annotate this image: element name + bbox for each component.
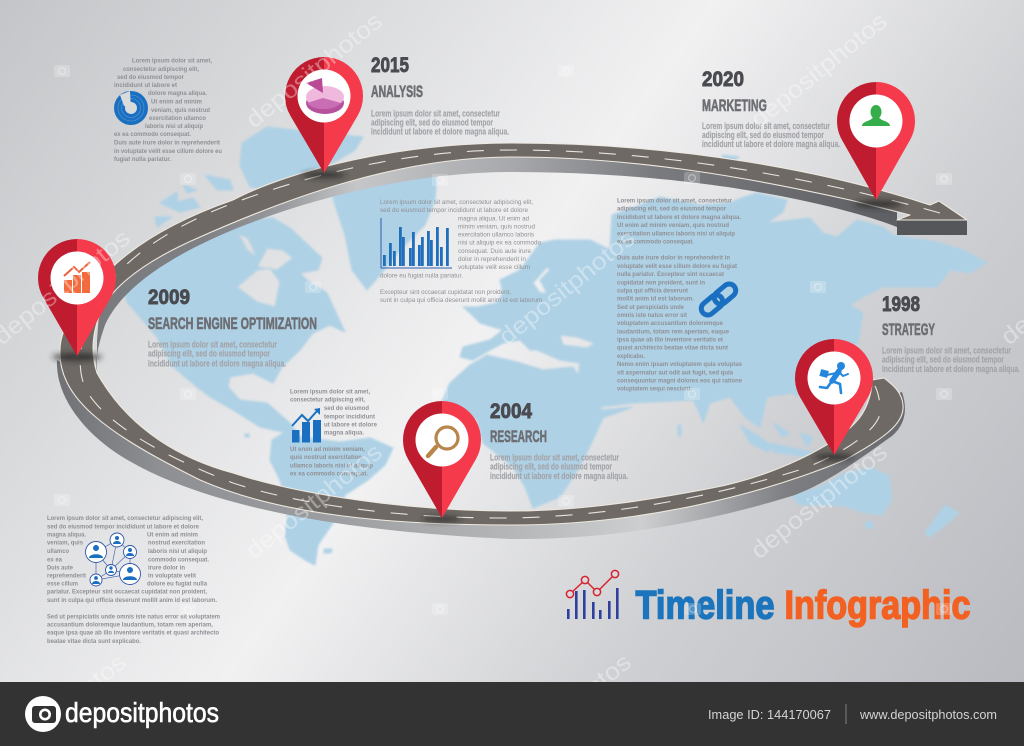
- icon: depositphotos logo: [25, 696, 61, 732]
- milestone: 2020 marketing: [702, 67, 840, 150]
- text block: right column with chain icon: ipsa quae ab illo inventore veritatis et: [617, 337, 724, 344]
- title: Timeline Infographic: Timeline: [636, 584, 774, 628]
- milestone: 2009 search engine optimization: adipiscing elit, sed do eiusmod tempor: [148, 348, 270, 360]
- text block: lower centre with growth icon: magna aliqua.: [324, 429, 364, 436]
- text block: right column with chain icon: quasi architecto beatae vitae dicta sunt: [617, 345, 729, 352]
- icon: growth chart: [292, 408, 321, 442]
- text block: top left with radial icon: dolore magna aliqua.: [148, 90, 207, 97]
- text block: bottom left with network icon: sunt in culpa qui officia deserunt mollit anim id est laborum.: [47, 597, 217, 604]
- text block: lower centre with growth icon: ullamco laboris nisi ut aliquip: [290, 462, 373, 469]
- milestone: 2020 marketing: 2020: [702, 67, 744, 91]
- icon: rising bars: [64, 262, 90, 293]
- milestone: 2020 marketing: MARKETING: [702, 97, 767, 115]
- footer bar: Image ID: 144170067: [708, 707, 831, 722]
- text block: right column with chain icon: adipiscing elit, sed do eiusmod tempor: [617, 206, 726, 213]
- text block: top left with radial icon: Duis aute irure dolor in reprehenderit: [114, 140, 221, 146]
- text block: top left with radial icon: Ut enim ad minim: [151, 98, 202, 106]
- text block: centre with bar chart: Lorem ipsum dolor sit amet, consectetur adipiscing elit,: [380, 199, 533, 206]
- text block: centre with bar chart: [380, 199, 544, 304]
- text block: lower centre with growth icon: sed do eiusmod: [324, 405, 369, 412]
- icon: pie chart: [306, 78, 344, 114]
- text block: centre with bar chart: exercitation ullamco laboris: [458, 232, 534, 239]
- milestone: 2009 search engine optimization: [148, 285, 317, 370]
- milestone: 2009 search engine optimization: 2009: [148, 285, 190, 309]
- road: lower side wall: [57, 360, 905, 539]
- text block: right column with chain icon: consequuntur magni dolores eos qui ratione: [617, 378, 742, 385]
- watermarks: depositphotos: [241, 439, 388, 565]
- text block: centre with bar chart: nisi ut aliquip ex ea commodo: [458, 240, 541, 247]
- text block: lower centre with growth icon: ex ea commodo consequat.: [290, 470, 368, 477]
- map: Australia and New Zealand: [792, 468, 959, 537]
- milestone: 1998 strategy: STRATEGY: [882, 321, 935, 339]
- text block: centre with bar chart: Excepteur sint occaecat cupidatat non proident,: [380, 289, 511, 296]
- text block: top left with radial icon: consectetur adipiscing elit,: [123, 66, 199, 73]
- text block: top left with radial icon: fugiat nulla pariatur.: [114, 156, 171, 163]
- milestone: 2015 analysis: [371, 53, 509, 138]
- text block: centre with bar chart: sed do eiusmod tempor incididunt ut labore et dolore: [380, 207, 528, 214]
- text block: top left with radial icon: exercitation ullamco: [149, 115, 206, 122]
- text block: bottom left with network icon: in voluptate velit: [148, 572, 197, 579]
- milestone: 2004 research: incididunt ut labore et dolore magna aliqua.: [490, 471, 628, 482]
- text block: lower centre with growth icon: Lorem ipsum dolor sit amet,: [290, 389, 370, 396]
- watermarks: depositphotos: [241, 8, 388, 134]
- pin: 2015 analysis: [285, 57, 363, 173]
- milestone: 2020 marketing: adipiscing elit, sed do eiusmod tempor: [702, 130, 824, 141]
- pin: 1998 strategy: [795, 339, 873, 455]
- milestone: 2004 research: adipiscing elit, sed do eiusmod tempor: [490, 462, 612, 472]
- title: Timeline Infographic: Infographic: [784, 584, 970, 628]
- watermarks: depositphotos: [746, 439, 893, 565]
- text block: bottom left with network icon: sed do eiusmod tempor incididunt ut labore et dolore: [47, 523, 199, 530]
- text block: right column with chain icon: incididunt ut labore et dolore magna aliqua.: [617, 214, 741, 221]
- text block: right column with chain icon: nulla pariatur. Excepteur sint occaecat: [617, 271, 725, 278]
- milestone: 2015 analysis: 2015: [371, 53, 409, 77]
- road: [57, 143, 967, 539]
- footer bar: [0, 682, 1024, 746]
- text block: right column with chain icon: Duis aute irure dolor in reprehenderit in: [617, 255, 730, 262]
- milestone: 2004 research: 2004: [490, 399, 532, 423]
- bar chart: [381, 218, 452, 268]
- milestone: 2009 search engine optimization: SEARCH ENGINE OPTIMIZATION: [148, 315, 317, 333]
- text block: centre with bar chart: consequat. Duis aute irure: [458, 248, 531, 255]
- text block: top left with radial icon: in voluptate velit esse cillum dolore eu: [114, 148, 222, 155]
- text block: bottom left with network icon: Duis aute: [47, 564, 73, 571]
- text block: top left with radial icon: ex ea commodo consequat.: [114, 131, 191, 138]
- map: North America: [120, 218, 345, 437]
- text block: right column with chain icon: culpa qui officia deserunt: [617, 288, 689, 295]
- pin: 2020 marketing: [837, 82, 915, 200]
- milestone: 2020 marketing: incididunt ut labore et dolore magna aliqua.: [702, 139, 840, 150]
- text block: bottom left with network icon: commodo consequat.: [148, 556, 209, 563]
- milestone: 2009 search engine optimization: Lorem ipsum dolor sit amet, consectetur: [148, 340, 277, 350]
- text block: right column with chain icon: omnis iste natus error sit: [617, 312, 688, 319]
- text block: lower centre with growth icon: ut labore et dolore: [324, 421, 377, 428]
- text block: right column with chain icon: laudantium, totam rem aperiam, eaque: [617, 328, 729, 335]
- pin shadows: [52, 172, 902, 522]
- map: Southeast Asia islands: [678, 155, 817, 457]
- milestone: 2004 research: RESEARCH: [490, 428, 547, 446]
- text block: top left with radial icon: laboris nisi ut aliquip: [145, 123, 203, 130]
- world map: [120, 127, 987, 565]
- text block: lower centre with growth icon: [290, 389, 377, 477]
- milestone: 2020 marketing: Lorem ipsum dolor sit amet, consectetur: [702, 121, 830, 132]
- text block: top left with radial icon: [114, 58, 222, 163]
- text block: top left with radial icon: Lorem ipsum dolor sit amet,: [132, 58, 212, 65]
- text block: right column with chain icon: mollit anim id est laborum.: [617, 296, 694, 303]
- milestone: 2015 analysis: ANALYSIS: [371, 83, 423, 101]
- icon: radial ring chart: [114, 91, 148, 125]
- text block: bottom left with network icon: ex ea: [47, 556, 62, 563]
- road: upper side wall: [96, 150, 897, 373]
- text block: centre with bar chart: dolor in reprehenderit in: [458, 256, 526, 263]
- footer bar: www.depositphotos.com: [859, 707, 997, 722]
- text block: lower centre with growth icon: quis nostrud exercitation: [290, 454, 362, 461]
- text block: bottom left with network icon: eaque ipsa quae ab illo inventore veritatis et quasi architecto: [47, 630, 219, 637]
- text block: right column with chain icon: explicabo.: [617, 353, 645, 360]
- text block: bottom left with network icon: irure dolor in: [148, 564, 185, 571]
- text block: bottom left with network icon: veniam, quis: [47, 540, 83, 547]
- text block: right column with chain icon: sit aspernatur aut odit aut fugit, sed quia: [617, 369, 733, 376]
- text block: right column with chain icon: Lorem ipsum dolor sit amet, consectetur: [617, 198, 732, 205]
- text block: right column with chain icon: exercitation ullamco laboris nisi ut aliquip: [617, 230, 735, 237]
- text block: bottom left with network icon: Sed ut perspiciatis unde omnis iste natus error sit voluptatem: [47, 613, 220, 620]
- text block: top left with radial icon: sed do eiusmod tempor: [117, 74, 184, 81]
- milestone: 1998 strategy: [882, 292, 1020, 375]
- text block: lower centre with growth icon: consectetur adipiscing elit,: [290, 397, 365, 404]
- icon: chain link: [699, 281, 738, 318]
- text block: right column with chain icon: Sed ut perspiciatis unde: [617, 304, 684, 311]
- text block: bottom left with network icon: Lorem ipsum dolor sit amet, consectetur adipiscing elit,: [47, 515, 203, 522]
- text block: centre with bar chart: minim veniam, quis nostrud: [458, 224, 535, 230]
- text block: bottom left with network icon: magna aliqua.: [47, 531, 86, 538]
- text block: right column with chain icon: voluptatem sequi nesciunt.: [617, 386, 692, 393]
- text block: bottom left with network icon: ullamco: [47, 548, 69, 555]
- milestone: 2004 research: Lorem ipsum dolor sit amet, consectetur: [490, 452, 619, 464]
- text block: bottom left with network icon: nostrud exercitation: [148, 540, 205, 547]
- text block: right column with chain icon: voluptatem accusantium doloremque: [617, 320, 723, 327]
- milestone: 1998 strategy: 1998: [882, 292, 920, 316]
- icon: people network: [86, 533, 140, 586]
- milestone: 2015 analysis: incididunt ut labore et dolore magna aliqua.: [371, 126, 509, 138]
- text block: right column with chain icon: [617, 198, 742, 393]
- map: Africa: [442, 355, 633, 508]
- text block: bottom left with network icon: laboris nisi ut aliquip: [148, 548, 207, 555]
- text block: lower centre with growth icon: tempor incididunt: [324, 413, 376, 420]
- text block: bottom left with network icon: Ut enim ad minim: [147, 531, 198, 538]
- map: South America: [245, 432, 393, 565]
- pin: 2009 search engine optimization: [38, 239, 116, 356]
- milestone: 2009 search engine optimization: incididunt ut labore et dolore magna aliqua.: [148, 358, 286, 370]
- text block: bottom left with network icon: reprehenderit: [47, 572, 87, 579]
- road: arrow base block: [897, 220, 967, 235]
- text block: top left with radial icon: incididunt ut labore et: [114, 82, 178, 89]
- text block: top left with radial icon: veniam, quis nostrud: [151, 107, 210, 114]
- icon: running businessman: [819, 362, 848, 393]
- icon: magnifier: [428, 427, 458, 456]
- text block: right column with chain icon: Ut enim ad minim veniam, quis nostrud: [617, 222, 729, 229]
- text block: bottom left with network icon: pariatur. Excepteur sint occaecat cupidatat non proident,: [47, 589, 207, 596]
- text block: bottom left with network icon: esse cillum: [47, 581, 78, 588]
- text block: right column with chain icon: ex ea commodo consequat.: [617, 239, 694, 246]
- text block: bottom left with network icon: beatae vitae dicta sunt explicabo.: [47, 638, 141, 645]
- text block: bottom left with network icon: [47, 515, 220, 645]
- text block: centre with bar chart: sunt in culpa qui officia deserunt mollit anim id est laborum.: [380, 297, 544, 304]
- map: Eurasia: [460, 193, 987, 428]
- text block: right column with chain icon: voluptate velit esse cillum dolore eu fugiat: [617, 263, 738, 270]
- text block: centre with bar chart: voluptate velit esse cillum: [458, 264, 530, 271]
- text block: centre with bar chart: dolore eu fugiat nulla pariatur.: [380, 273, 463, 280]
- text block: bottom left with network icon: dolore eu fugiat nulla: [147, 581, 207, 588]
- icon: person: [862, 105, 890, 126]
- map: Greenland and Arctic: [155, 127, 437, 290]
- watermarks: depositphotos: [494, 225, 641, 351]
- text block: right column with chain icon: Nemo enim ipsam voluptatem quia voluptas: [617, 361, 742, 368]
- milestone: 2004 research: [490, 399, 628, 482]
- footer bar: depositphotos: [65, 697, 219, 728]
- road: centre dashes: [80, 150, 940, 518]
- text block: lower centre with growth icon: Ut enim ad minim veniam,: [290, 446, 365, 453]
- watermarks: depositphotos: [746, 8, 893, 134]
- road: asphalt surface: [60, 143, 967, 525]
- text block: bottom left with network icon: accusantium doloremque laudantium, totam rem aperiam,: [47, 622, 213, 629]
- milestone: 2015 analysis: Lorem ipsum dolor sit amet, consectetur: [371, 108, 500, 120]
- pin: 2004 research: [403, 401, 481, 518]
- text block: right column with chain icon: cupidatat non proident, sunt in: [617, 279, 705, 286]
- text block: centre with bar chart: magna aliqua. Ut enim ad: [458, 215, 529, 222]
- milestone: 2015 analysis: adipiscing elit, sed do eiusmod tempor: [371, 118, 493, 128]
- icon: title chart logo: [566, 570, 619, 619]
- title: Timeline Infographic: [566, 570, 970, 628]
